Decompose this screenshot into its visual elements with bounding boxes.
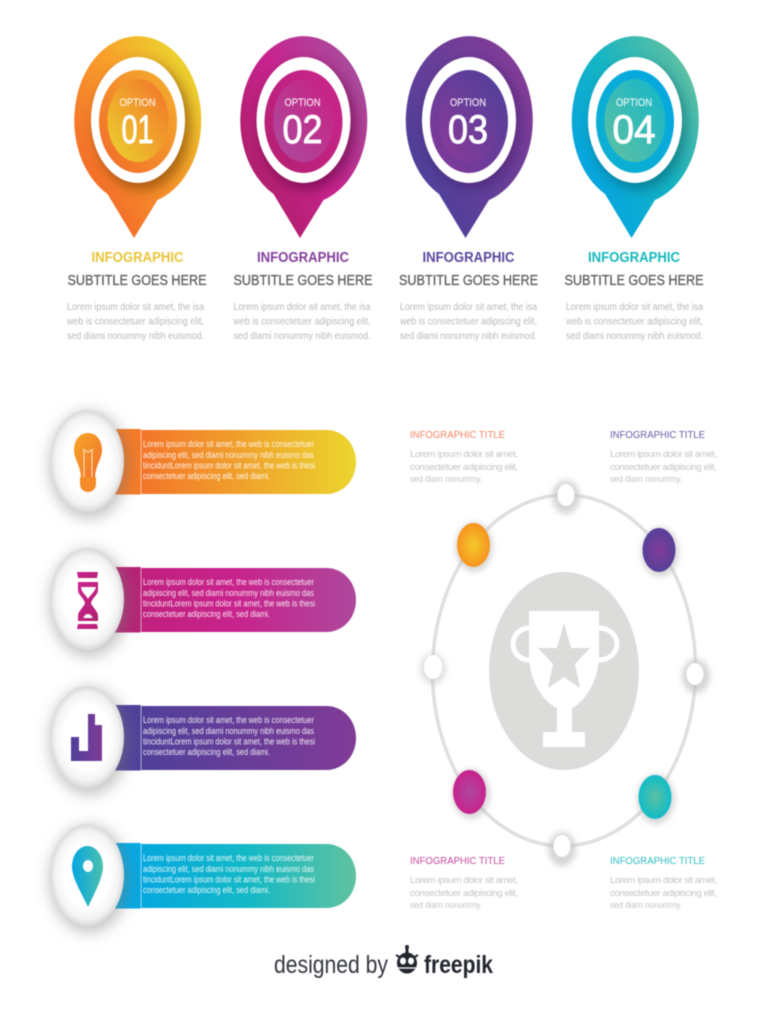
callout: bottom right title: consectetuer adipiscing elit, [610,888,717,899]
bar 4: Lorem ipsum dolor sit amet, the web is consectetuer [143,853,315,864]
panel: row 1 lightbulb [49,410,356,519]
callout: bottom left title: Lorem ipsum dolor sit amet, [410,875,518,886]
bar 3: adipiscing elit, sed diami nonummy nibh euismo das [143,726,314,737]
white disc 1 [49,410,129,519]
callout: top left title [410,429,518,485]
heading: infographic 3: INFOGRAPHIC [422,250,515,266]
white disc 2 [49,548,129,657]
pin: option 01: 01 [122,108,154,152]
text block 1 [66,302,204,342]
subtitle 2: SUBTITLE GOES HERE [234,272,372,289]
text block 3: sed diami nonummy nibh euismod. [400,331,537,342]
node: magenta [452,769,490,819]
pin: option 03 [406,36,533,238]
pin: option 01: OPTION [120,97,156,109]
callout: bottom right title [610,855,717,911]
heading: infographic 1: INFOGRAPHIC [92,250,184,266]
icon: location pin [72,846,103,907]
icon: hourglass [77,572,98,629]
node: left [420,653,446,685]
text block 4 [565,302,703,342]
bar 3: tinciduntLorem ipsum dolor sit amet, the web is thesi [143,736,315,748]
icon: freepik mascot [396,945,418,974]
callout: bottom left title: INFOGRAPHIC TITLE [410,855,505,867]
pin: option 02: OPTION [284,97,321,109]
text block 3: web is consectetuer adipiscing elit, [399,316,537,328]
footer: freepik credit [274,945,493,979]
text block 3: Lorem ipsum dolor sit amet, the isa [400,302,537,313]
text block 1: sed diami nonummy nibh euismod. [67,331,204,342]
text block 4: Lorem ipsum dolor sit amet, the isa [566,302,703,313]
subtitle 4: SUBTITLE GOES HERE [564,272,704,289]
icon: stepped bars [71,714,102,761]
node: orange [455,522,493,572]
text block 2 [233,302,371,342]
option 4 column [564,36,704,342]
callout: bottom left title [410,855,518,911]
callout: top right title: Lorem ipsum dolor sit amet, [610,449,717,460]
callout: top right title: INFOGRAPHIC TITLE [610,429,705,441]
bar 4 [112,843,356,908]
icon: trophy [513,611,617,747]
node: teal [637,774,675,824]
callout: bottom right title: Lorem ipsum dolor sit amet, [610,875,717,886]
bar 4: tinciduntLorem ipsum dolor sit amet, the web is thesi [143,874,315,886]
bar 1 [112,429,356,494]
bar 2: tinciduntLorem ipsum dolor sit amet, the web is thesi [143,598,315,610]
option 2 column [233,36,372,342]
text block 4: sed diami nonummy nibh euismod. [566,331,703,342]
pin: option 03: 03 [448,108,488,152]
text block 2: web is consectetuer adipiscing elit, [233,316,370,328]
option 3 column [399,36,538,342]
callout: bottom right title: INFOGRAPHIC TITLE [610,855,705,867]
pin: option 01 [74,36,201,238]
pin: option 04: OPTION [616,97,652,109]
text block 1: web is consectetuer adipiscing elit, [66,316,204,328]
pin: option 04: 04 [612,108,656,152]
panel: row 4 location [49,824,356,933]
bar 3: consectetuer adipiscing elit, sed diami. [143,747,270,758]
callout: bottom left title: sed diam nonummy. [410,900,482,911]
bar 2: Lorem ipsum dolor sit amet, the web is consectetuer [143,577,315,588]
node: top [552,480,580,514]
bar 3 [112,705,356,770]
heading: infographic 2: INFOGRAPHIC [257,250,349,266]
pin: option 04 [572,36,699,238]
node: purple [641,527,679,577]
text block 3 [399,302,537,342]
callout: top left title: Lorem ipsum dolor sit amet, [410,449,518,460]
callout: top right title [610,429,717,485]
white disc 4 [49,824,129,933]
pin: option 03: OPTION [450,97,486,109]
bar 4: adipiscing elit, sed diami nonummy nibh euismo das [143,864,314,875]
diagram: orbit with trophy [420,480,710,866]
text block 4: web is consectetuer adipiscing elit, [565,316,703,328]
bar 1: Lorem ipsum dolor sit amet, the web is consectetuer [143,439,315,450]
white disc 3 [49,686,129,795]
orbit ring [429,493,699,848]
pin: option 02: 02 [282,108,322,152]
option 1 column [66,36,207,342]
bar 3: Lorem ipsum dolor sit amet, the web is consectetuer [143,715,315,726]
text block 2: sed diami nonummy nibh euismod. [234,331,370,342]
footer: freepik credit: designed by [274,951,388,979]
node: bottom [548,832,576,866]
heading: infographic 4: INFOGRAPHIC [588,250,680,266]
footer: freepik credit: freepik [424,951,493,979]
bar 2 [112,567,356,632]
text block 1: Lorem ipsum dolor sit amet, the isa [67,302,204,313]
callout: top right title: sed diam nonummy. [610,474,682,485]
bar 1: adipiscing elit, sed diami nonummy nibh euismo das [143,450,314,461]
bar 2: consectetuer adipiscing elit, sed diami. [143,609,270,620]
node: right [682,659,710,693]
callout: bottom left title: consectetuer adipiscing elit, [410,888,518,899]
bar 2: adipiscing elit, sed diami nonummy nibh euismo das [143,588,314,599]
callout: top right title: consectetuer adipiscing elit, [610,462,717,473]
panel: row 3 chart [49,686,356,795]
bar 4: consectetuer adipiscing elit, sed diami. [143,885,270,896]
text block 2: Lorem ipsum dolor sit amet, the isa [234,302,371,313]
bar 1: consectetuer adipiscing elit, sed diami. [143,471,270,482]
center disc [489,572,639,770]
callout: top left title: INFOGRAPHIC TITLE [410,429,505,441]
bar 1: tinciduntLorem ipsum dolor sit amet, the web is thesi [143,460,315,472]
callout: bottom right title: sed diam nonummy. [610,900,682,911]
callout: top left title: consectetuer adipiscing elit, [410,462,518,473]
icon: lightbulb [74,433,102,492]
callout: top left title: sed diam nonummy. [410,474,482,485]
pin: option 02 [240,36,367,238]
subtitle 3: SUBTITLE GOES HERE [399,272,538,289]
subtitle 1: SUBTITLE GOES HERE [68,272,206,289]
panel: row 2 hourglass [49,548,356,657]
